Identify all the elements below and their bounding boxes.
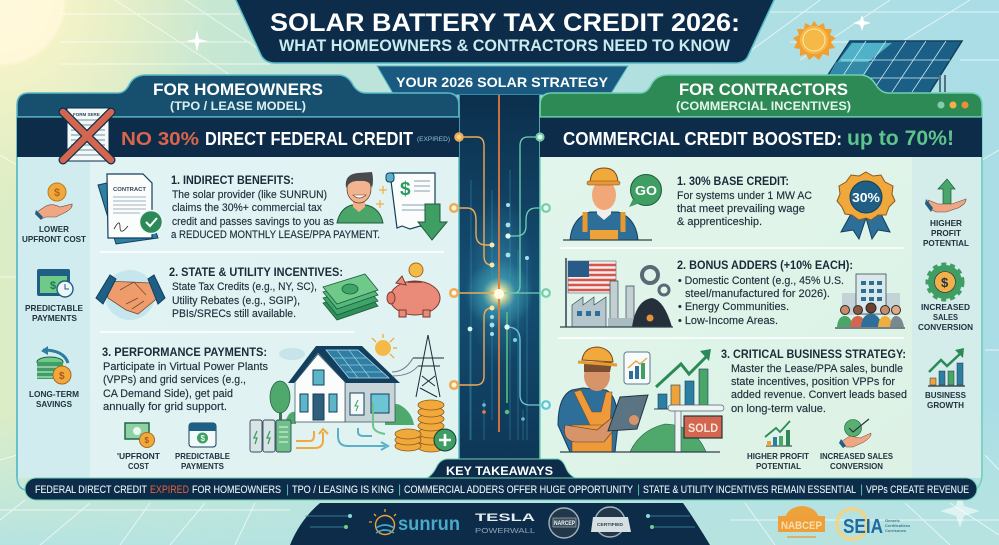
icon: reduced bill with down arrow (376, 173, 447, 240)
section 1: base credit: that meet prevailing wage (677, 203, 805, 215)
alert band (17, 117, 459, 157)
house sun (372, 334, 397, 358)
sidebar: long-term savings: SAVINGS (36, 400, 73, 409)
takeaways bar (25, 478, 977, 500)
section 3: performance payments: COST (128, 462, 149, 471)
section 3: critical business strategy: CONVERSION (830, 462, 883, 471)
section 2: state and utility incentives: Utility Rebates (e.g., SGIP), (172, 295, 300, 307)
takeaways bar: | (398, 482, 401, 496)
icon: upfront cost (125, 423, 154, 448)
section 3: performance payments: 'UPFRONT (117, 452, 160, 461)
sidebar: higher profit potential: POTENTIAL (923, 239, 969, 248)
footer glow lines (305, 514, 695, 529)
sidebar: lower upfront cost: LOWER (39, 225, 69, 234)
section 3: critical business strategy: 3. CRITICAL BUSINESS STRATEGY: (721, 347, 906, 361)
section 3: performance payments: 3. PERFORMANCE PAYMENTS: (102, 345, 267, 359)
banner: your 2026 solar strategy: YOUR 2026 SOLAR STRATEGY (396, 74, 609, 90)
section 3: critical business strategy: HIGHER PROFIT (747, 452, 809, 461)
coin stacks (395, 400, 444, 452)
section 1: indirect benefits: credit and passes savings to you as (172, 216, 334, 228)
footer: partner logos (290, 503, 911, 545)
logo: certification seal: CERTIFIED (597, 522, 624, 527)
title banner (235, 0, 775, 63)
connector rings right (536, 134, 550, 409)
icon: payment calendar (189, 423, 216, 447)
icon: sparkle top right (853, 15, 871, 31)
section 3: performance payments: annually for grid support. (103, 401, 227, 413)
panel: for homeowners (17, 75, 462, 490)
section 3: performance payments (102, 334, 456, 471)
takeaways bar: | (637, 482, 640, 496)
logo: tesla powerwall: TESLA (475, 512, 535, 524)
header text: FOR HOMEOWNERS (153, 81, 323, 99)
section 1: base credit: For systems under 1 MW AC (677, 190, 812, 202)
takeaways bar: | (286, 482, 289, 496)
sidebar: predictable payments: PREDICTABLE (25, 304, 84, 313)
alert band: (EXPIRED) (417, 136, 450, 143)
key takeaways (25, 459, 977, 500)
section 3: performance payments: Participate in Virtual Power Plants (103, 361, 268, 373)
logo: seia: Generic (885, 518, 901, 523)
takeaways bar: FEDERAL DIRECT CREDIT (35, 484, 147, 496)
sidebar: increased sales conversion (918, 264, 973, 332)
sidebar: higher profit potential (923, 179, 969, 248)
banner: your 2026 solar strategy (377, 66, 628, 95)
icon: growth chart (654, 349, 711, 409)
icon: sold sign: SOLD (688, 421, 718, 435)
icon: sparkle top left (186, 30, 208, 52)
icon: US flag (566, 258, 616, 327)
green trunk line (506, 312, 508, 403)
logo: narcep seal: NARCEP (554, 520, 576, 527)
section 2: bonus adders: • Energy Communities. (678, 301, 789, 313)
left connectors (459, 137, 499, 385)
icon: solar house with battery, grid and coins (250, 334, 456, 452)
sidebar: long-term savings (29, 346, 79, 409)
sidebar: higher profit potential: PROFIT (931, 229, 961, 238)
section 1: indirect benefits: 1. INDIRECT BENEFITS: (171, 173, 294, 187)
sidebar: lower upfront cost: $ (54, 187, 60, 199)
icon: cash stack (323, 274, 378, 320)
sidebar: lower upfront cost (22, 183, 86, 244)
logo: sunrun: sunrun (398, 514, 460, 535)
section 2: bonus adders: steel/manufactured for 2026). (685, 288, 830, 300)
icon: payment calendar: $ (200, 434, 206, 443)
icon: contract with check: CONTRACT (113, 187, 147, 193)
logo: certification seal (591, 507, 631, 537)
logo: seia (837, 509, 911, 539)
section 3: performance payments: PREDICTABLE (175, 452, 231, 461)
alert band: NO 30% (121, 128, 199, 149)
sidebar: predictable payments: PAYMENTS (32, 314, 78, 323)
takeaways bar: STATE & UTILITY INCENTIVES REMAIN ESSENTIAL (643, 484, 856, 496)
icon: solar panel top right (815, 41, 962, 95)
panel: for contractors (536, 75, 982, 491)
panel frame and header (540, 75, 982, 117)
logo: sunrun (369, 509, 460, 535)
section 1: base credit (563, 168, 895, 240)
icon: crossed-out tax form (63, 108, 111, 161)
takeaways bar: COMMERCIAL ADDERS OFFER HUGE OPPORTUNITY (404, 484, 633, 496)
sidebar: business growth: BUSINESS (925, 391, 967, 400)
sidebar: predictable payments (25, 269, 84, 323)
section 2: state and utility incentives (96, 263, 440, 320)
header text (676, 81, 851, 113)
sidebar: increased sales conversion: SALES (933, 313, 958, 322)
icon: increased conversion small (839, 419, 871, 448)
icon: piggy bank (387, 263, 440, 317)
section 2: bonus adders: 2. BONUS ADDERS (+10% EACH): (677, 258, 853, 272)
plus badge (434, 429, 456, 451)
battery bank (250, 420, 291, 452)
icon: sun top right (793, 21, 836, 60)
takeaways bar: FOR HOMEOWNERS (192, 484, 281, 496)
sidebar: higher profit potential: HIGHER (930, 219, 962, 228)
section 3: critical business strategy: INCREASED SALES (820, 452, 894, 461)
icon: chart bubble (624, 352, 650, 384)
section 3: critical business strategy: state incentives, position VPPs for (731, 376, 895, 388)
icon: upfront cost: $ (144, 436, 150, 445)
key takeaways tab: KEY TAKEAWAYS (446, 464, 553, 478)
logo: tesla powerwall: POWERWALL (475, 526, 535, 535)
logo: tesla powerwall (475, 512, 535, 535)
alert band: DIRECT FEDERAL CREDIT (205, 128, 414, 149)
icon: 30% badge (837, 172, 895, 239)
section 3: critical business strategy: POTENTIAL (756, 462, 801, 471)
sidebar: lower upfront cost: UPFRONT COST (22, 235, 86, 244)
highlight band: up to 70%! (847, 127, 954, 150)
icon: 30% badge: 30% (852, 190, 880, 205)
central circuit column (459, 95, 540, 478)
title: SOLAR BATTERY TAX CREDIT 2026: (270, 9, 740, 37)
icon: worker with GO bubble (563, 168, 662, 240)
section 3: critical business strategy: on long-term value. (731, 403, 826, 415)
logo: seia: Corrisones (885, 528, 907, 533)
takeaways bar: TPO / LEASING IS KING (292, 484, 394, 496)
sidebar: increased sales conversion: CONVERSION (918, 323, 973, 332)
icon: higher profit small (765, 421, 792, 446)
section 1: indirect benefits: claims the 30%+ commercial tax (172, 202, 322, 214)
sidebar: long-term savings: LONG-TERM (29, 390, 79, 399)
section 1: base credit: & apprenticeship. (677, 216, 762, 228)
sidebar: business growth (925, 348, 967, 410)
subtitle: WHAT HOMEOWNERS & CONTRACTORS NEED TO KNOW (279, 37, 730, 55)
right connectors (500, 137, 540, 405)
orange trunk line (498, 95, 500, 432)
section 2: state and utility incentives: 2. STATE & UTILITY INCENTIVES: (169, 265, 343, 279)
icon: worker with tablet (558, 347, 648, 452)
icon: factory, gears and coal (560, 267, 673, 327)
tree (270, 381, 290, 421)
logo: seia: Certificatless (885, 523, 911, 528)
section 1: indirect benefits (98, 172, 447, 244)
sidebar: business growth: GROWTH (927, 401, 964, 410)
section 2: state and utility incentives: PBIs/SRECs still available. (172, 308, 296, 320)
key takeaways tab (425, 459, 578, 479)
section 1: base credit: 1. 30% BASE CREDIT: (677, 174, 789, 188)
icon: reduced bill with down arrow: $ (400, 179, 411, 200)
section 3: performance payments: PAYMENTS (181, 462, 225, 471)
sidebar: long-term savings: $ (59, 371, 65, 382)
header text (153, 81, 323, 113)
sidebar: predictable payments: $ (50, 280, 56, 292)
header text: (TPO / LEASE MODEL) (170, 99, 306, 113)
icon: building and community (835, 274, 905, 328)
icon: sparkle bottom right (940, 490, 980, 528)
logo: nabcep (778, 506, 825, 537)
icon: crossed-out tax form: FORM SERE (73, 112, 100, 117)
sidebar: increased sales conversion: INCREASED (921, 303, 970, 312)
section 3: critical business strategy: added revenue. Convert leads based (731, 389, 907, 401)
icon: sold sign (560, 405, 724, 452)
logo: narcep seal (549, 508, 579, 538)
logo: seia: SEIA (843, 516, 883, 538)
takeaways bar: VPPs CREATE REVENUE (866, 484, 969, 496)
section 3: critical business strategy: Master the Lease/PPA sales, bundle (731, 363, 903, 375)
logo: nabcep: NABCEP (781, 520, 822, 532)
section 3: critical business strategy (558, 347, 907, 471)
icon: contract with check (98, 174, 162, 244)
header text: (COMMERCIAL INCENTIVES) (676, 99, 851, 113)
window dots (938, 102, 968, 108)
sidebar: increased sales conversion: $ (941, 275, 949, 290)
icon: worker with GO bubble: GO (635, 183, 657, 198)
connector rings left (450, 134, 462, 389)
icon: handshake (96, 270, 165, 320)
section 2: bonus adders (560, 258, 905, 328)
section 3: performance payments: CA Demand Side), get paid (103, 388, 233, 400)
section 2: bonus adders: • Domestic Content (e.g., 45% U.S. (678, 275, 844, 287)
panel frame and header (17, 75, 459, 477)
energy flow arrows (296, 402, 388, 450)
highlight band (540, 117, 982, 157)
section 3: performance payments: (VPPs) and grid services (e.g., (103, 374, 246, 386)
highlight band: COMMERCIAL CREDIT BOOSTED: (563, 129, 842, 149)
takeaways bar: | (860, 482, 863, 496)
header text: FOR CONTRACTORS (679, 81, 848, 99)
section 1: indirect benefits: The solar provider (like SUNRUN) (172, 189, 327, 201)
icon: smiling homeowner (337, 172, 383, 223)
section 2: bonus adders: • Low-Income Areas. (678, 315, 778, 327)
glowing nodes (468, 203, 529, 421)
transmission pylon (392, 335, 444, 397)
section 2: state and utility incentives: State Tax Credits (e.g., NY, SC), (172, 281, 317, 293)
takeaways bar: EXPIRED (150, 484, 189, 496)
section 1: indirect benefits: a REDUCED MONTHLY LEASE/PPA PAYMENT. (171, 229, 380, 241)
